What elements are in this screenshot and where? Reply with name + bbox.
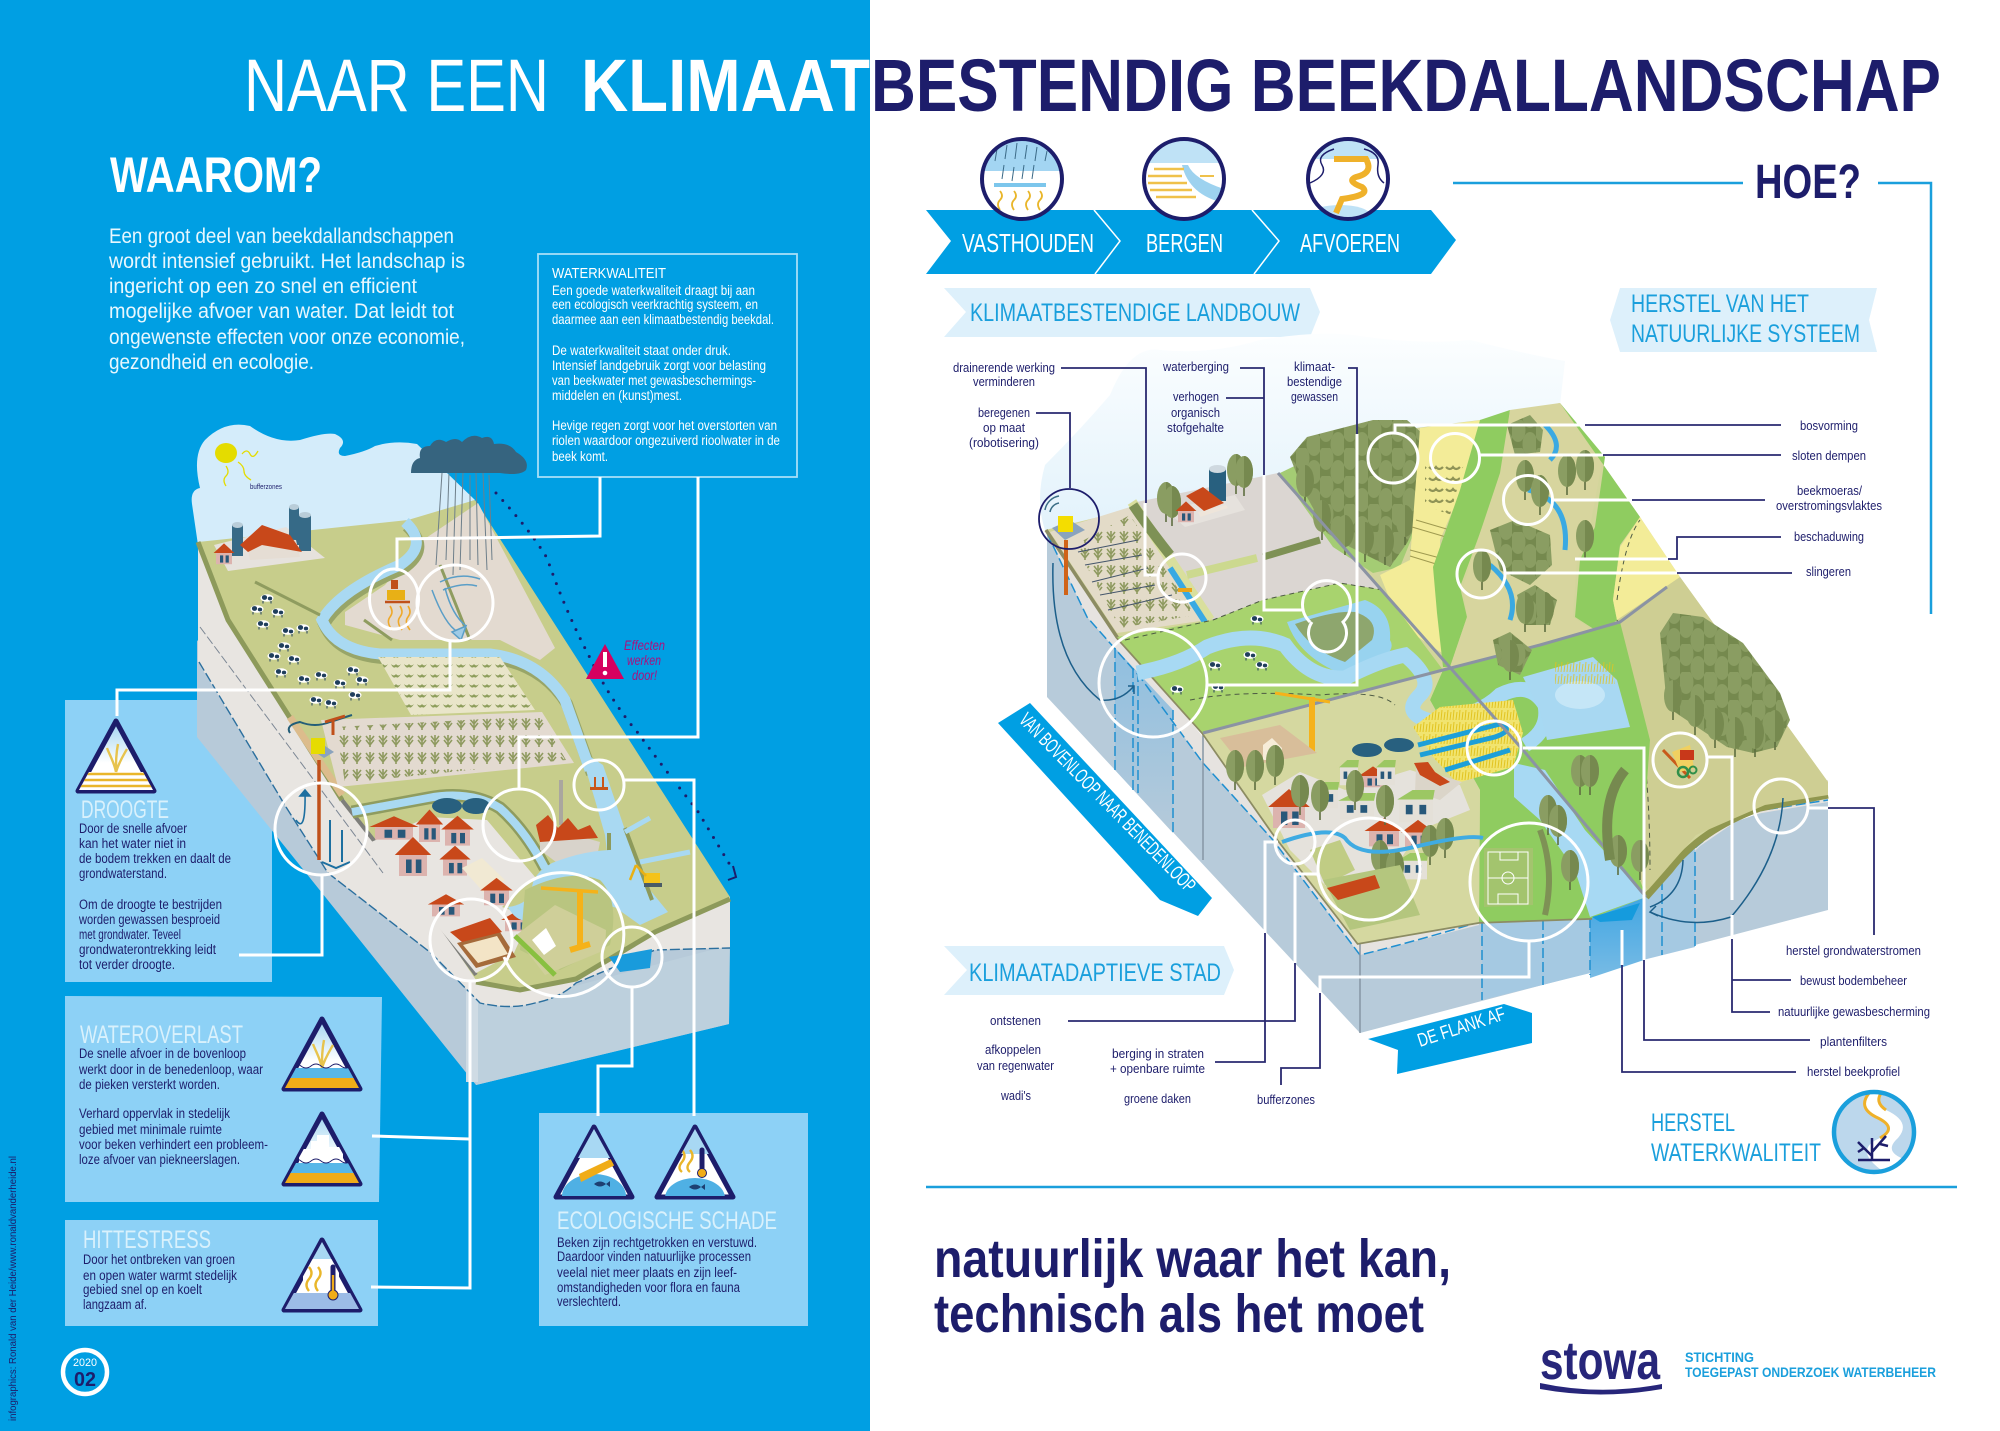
meadow — [1117, 583, 1443, 733]
cows — [250, 594, 368, 708]
panel: ecologische schade: Daardoor vinden natuurlijke processen — [557, 1249, 751, 1264]
labels: klimaatbestendige landbouw: (robotisering) — [969, 435, 1039, 450]
labels: klimaatbestendige landbouw: drainerende werking — [953, 360, 1055, 375]
panel: droogte: kan het water niet in — [79, 836, 186, 851]
beige field — [1132, 473, 1383, 620]
groundwater zones — [1115, 648, 1173, 833]
right: process ribbon: BERGEN — [1146, 228, 1223, 258]
labels: klimaatadaptieve stad: groene daken — [1124, 1091, 1191, 1106]
right: process ribbon — [926, 210, 1456, 274]
labels: herstel natuurlijk systeem: beekmoeras/ — [1797, 483, 1862, 498]
panel: hittestress: en open water warmt stedelijk — [83, 1268, 237, 1283]
panel: ecologische schade: ECOLOGISCHE SCHADE — [557, 1207, 777, 1235]
panel: waterkwaliteit: Hevige regen zorgt voor het overstorten van — [552, 418, 777, 433]
field surface — [198, 500, 730, 988]
panel: wateroverlast: Verhard oppervlak in stedelijk — [79, 1106, 230, 1121]
banner: van bovenloop naar benedenloop — [998, 703, 1212, 916]
logo: stowa: stowa — [1540, 1331, 1661, 1391]
right: process ribbon: AFVOEREN — [1300, 228, 1400, 258]
ribbon: klimaatbestendige landbouw: KLIMAATBESTENDIGE LANDBOUW — [970, 299, 1300, 327]
heading: herstel waterkwaliteit — [1651, 1109, 1821, 1167]
bright green bank — [1560, 403, 1640, 633]
panel: droogte: tot verder droogte. — [79, 957, 175, 972]
panel: wateroverlast: loze afvoer van piekneerslagen. — [79, 1152, 240, 1167]
heading: herstel waterkwaliteit: WATERKWALITEIT — [1651, 1139, 1821, 1167]
labels: bodem en water: bewust bodembeheer — [1800, 973, 1908, 988]
panel: droogte: de bodem trekken en daalt de — [79, 851, 231, 866]
reed field with helophytes — [1413, 700, 1523, 783]
label: bufferzones: bufferzones — [250, 482, 282, 491]
lower green — [1430, 622, 1650, 922]
block side — [1047, 530, 1828, 1033]
valley trees — [1473, 415, 1594, 680]
labels: klimaatbestendige landbouw — [953, 359, 1342, 450]
panel: hittestress: Door het ontbreken van groen — [83, 1252, 235, 1267]
icon: afvoeren — [1308, 139, 1388, 225]
panel: waterkwaliteit — [538, 254, 797, 477]
panel: droogte: worden gewassen besproeid — [78, 912, 220, 927]
labels: klimaatbestendige landbouw: beregenen — [978, 405, 1030, 420]
labels: klimaatadaptieve stad: bufferzones — [1257, 1092, 1315, 1107]
water treatment tanks — [432, 798, 490, 814]
labels: herstel natuurlijk systeem: overstromingsvlaktes — [1776, 498, 1882, 513]
warning: effecten werken door: door! — [632, 668, 657, 683]
labels: klimaatbestendige landbouw: organisch — [1171, 405, 1220, 420]
front pond — [609, 949, 652, 972]
dotted arrow: effects continue — [496, 493, 736, 880]
labels: klimaatbestendige landbouw: verminderen — [973, 374, 1035, 389]
intro text: gezondheid en ecologie. — [109, 351, 314, 374]
labels: bodem en water: herstel grondwaterstromen — [1786, 943, 1921, 958]
stowa tagline: STICHTING — [1685, 1349, 1754, 1365]
groundwater arrows — [296, 790, 350, 868]
surface — [1045, 403, 1828, 943]
groundwater flow arrows — [1053, 563, 1783, 922]
ribbon: herstel natuurlijke systeem — [1610, 288, 1877, 352]
heading: waarom: WAAROM? — [110, 147, 322, 203]
intro text: wordt intensief gebruikt. Het landschap is — [108, 250, 465, 273]
pale sky — [1040, 334, 1565, 530]
ribbon: klimaatadaptieve stad: KLIMAATADAPTIEVE STAD — [969, 959, 1221, 987]
stowa tagline: TOEGEPAST ONDERZOEK WATERBEHEER — [1685, 1364, 1936, 1380]
badge: 2020 02: 2020 — [73, 1357, 97, 1369]
farm — [214, 504, 325, 571]
panel: droogte: grondwaterontrekking leidt — [79, 942, 216, 957]
lower channel — [352, 796, 545, 868]
labels: klimaatbestendige landbouw: waterberging — [1162, 359, 1229, 374]
town houses — [369, 810, 535, 931]
olive field and forest — [1617, 577, 1828, 890]
factory — [536, 780, 600, 868]
icon: droogte triangle — [75, 721, 157, 792]
town — [369, 817, 535, 973]
slogan: natuurlijk waar het kan, — [934, 1229, 1451, 1289]
labels: bodem en water: plantenfilters — [1820, 1034, 1887, 1049]
town grey area — [1262, 770, 1470, 900]
panel: droogte: met grondwater. Teveel — [79, 927, 181, 942]
storm cloud — [411, 436, 527, 474]
heading: hoe: HOE? — [1755, 156, 1861, 209]
icon: warm water triangle — [654, 1124, 736, 1200]
labels: herstel natuurlijk systeem — [1776, 418, 1882, 579]
lagoon and construction — [508, 850, 636, 921]
icon: wateroverlast city triangle — [281, 1114, 363, 1184]
pump robot — [1045, 496, 1085, 595]
intro text: Een groot deel van beekdallandschappen — [109, 225, 454, 248]
title: KLIMAAT — [581, 44, 870, 127]
panel: hittestress: HITTESTRESS — [83, 1226, 211, 1254]
heading: hoe — [1453, 156, 1931, 614]
panel: ecologische schade: verslechterd. — [557, 1294, 621, 1309]
ribbon: herstel natuurlijke systeem: HERSTEL VAN HET — [1631, 290, 1809, 318]
labels: klimaatadaptieve stad: van regenwater — [977, 1058, 1055, 1073]
panel: wateroverlast: gebied met minimale ruimte — [79, 1122, 222, 1137]
labels: klimaatbestendige landbouw: klimaat- — [1294, 359, 1335, 374]
intro text — [108, 225, 465, 374]
town base — [1203, 670, 1480, 943]
panel: wateroverlast: voor beken verhindert een probleem- — [79, 1137, 268, 1152]
building plot — [1220, 725, 1317, 767]
ribbon: herstel natuurlijke systeem: NATUURLIJKE SYSTEEM — [1631, 320, 1860, 348]
warning: effecten werken door: Effecten — [624, 638, 665, 653]
stowa tagline — [1685, 1349, 1936, 1380]
panel: wateroverlast — [65, 996, 382, 1202]
intro text: ongewenste effecten voor onze economie, — [109, 326, 465, 349]
slogan — [934, 1229, 1451, 1344]
warning: effecten werken door — [586, 638, 665, 683]
ribbon: klimaatbestendige landbouw — [944, 288, 1320, 337]
labels: klimaatadaptieve stad: berging in straten — [1112, 1046, 1204, 1061]
banner: de flank af: DE FLANK AF — [1415, 1004, 1508, 1052]
icon: herstel waterkwaliteit — [1834, 1092, 1914, 1172]
soccer field — [1484, 830, 1549, 915]
farm — [1157, 454, 1253, 527]
left blue background — [0, 0, 870, 1431]
labels: bodem en water: herstel beekprofiel — [1807, 1064, 1900, 1079]
tractor over field — [385, 580, 410, 630]
labels: klimaatbestendige landbouw: stofgehalte — [1167, 420, 1224, 435]
labels: bodem en water — [1778, 943, 1930, 1079]
irrigated crops — [378, 657, 535, 715]
icon: stuw triangle — [554, 1124, 634, 1200]
panel: ecologische schade — [539, 1113, 808, 1326]
pump with well — [289, 715, 352, 860]
right field channels — [625, 818, 690, 862]
panel: wateroverlast: De snelle afvoer in de bovenloop — [79, 1046, 246, 1061]
rule — [926, 1186, 1957, 1188]
weir — [590, 777, 608, 790]
panel: wateroverlast: de pieken versterkt worden. — [79, 1077, 220, 1092]
panel: waterkwaliteit: Intensief landgebruik zorgt voor belasting — [552, 358, 766, 373]
panel: waterkwaliteit: De waterkwaliteit staat onder druk. — [552, 343, 731, 358]
warning: effecten werken door: werken — [627, 653, 661, 668]
river — [324, 526, 592, 774]
soil strip — [198, 542, 730, 1006]
lake — [1523, 657, 1630, 740]
panel: waterkwaliteit: een ecologisch veerkrachtig systeem, en — [552, 297, 758, 312]
town buildings — [1268, 760, 1435, 879]
yellow field — [1380, 420, 1482, 655]
ribbon: klimaatadaptieve stad — [944, 946, 1234, 995]
panel: ecologische schade: veelal niet meer plaats en zijn leef- — [557, 1265, 737, 1280]
bank trees — [1539, 755, 1649, 890]
panel: wateroverlast: WATEROVERLAST — [80, 1021, 243, 1049]
drain swale — [1170, 568, 1205, 622]
soil strip — [1047, 533, 1479, 955]
banner: de flank af — [1368, 1004, 1532, 1074]
panel: waterkwaliteit: van beekwater met gewasbeschermings- — [552, 373, 756, 388]
lower river — [1514, 763, 1646, 917]
intro text: mogelijke afvoer van water. Dat leidt tot — [109, 300, 454, 323]
panel: hittestress: gebied snel op en koelt — [83, 1282, 202, 1297]
panel: droogte — [65, 700, 272, 982]
panel: waterkwaliteit: WATERKWALITEIT — [552, 265, 666, 282]
valley stream — [1490, 425, 1566, 620]
panel: droogte: DROOGTE — [81, 796, 169, 824]
corn field with drains — [1050, 507, 1207, 633]
labels: herstel natuurlijk systeem: bosvorming — [1800, 418, 1858, 433]
labels: herstel natuurlijk systeem: beschaduwing — [1794, 529, 1864, 544]
cows meadow — [1170, 615, 1268, 694]
run-off arrow — [432, 576, 480, 640]
icon: sun — [215, 443, 258, 486]
block side — [197, 640, 730, 1085]
slogan: technisch als het moet — [934, 1284, 1424, 1344]
labels: klimaatadaptieve stad: ontstenen — [990, 1013, 1041, 1028]
rain — [436, 473, 492, 575]
icon: wateroverlast land triangle — [281, 1019, 363, 1089]
crane — [1275, 693, 1330, 753]
title — [244, 44, 1941, 127]
labels: klimaatadaptieve stad: afkoppelen — [985, 1042, 1041, 1057]
glasshouse farm — [450, 918, 516, 968]
marsh pond — [1287, 600, 1392, 677]
panel: waterkwaliteit: daarmee aan een klimaatbestendig beekdal. — [552, 312, 774, 327]
valley — [1450, 403, 1603, 667]
title: NAAR EEN — [244, 44, 549, 127]
labels: klimaatbestendige landbouw: bestendige — [1287, 374, 1342, 389]
crane — [541, 888, 598, 950]
road — [1203, 473, 1667, 897]
right connector lines and circles — [1036, 368, 1874, 1085]
labels: herstel natuurlijk systeem: sloten dempen — [1792, 448, 1866, 463]
labels: klimaatadaptieve stad: + openbare ruimte — [1110, 1061, 1205, 1076]
lower river — [580, 750, 668, 925]
panel: waterkwaliteit: beek komt. — [552, 449, 608, 464]
panel: ecologische schade: Beken zijn rechtgetrokken en verstuwd. — [557, 1235, 757, 1250]
forest base — [1280, 428, 1430, 573]
tractor — [1663, 745, 1696, 778]
sky behind farm — [192, 425, 475, 560]
labels: klimaatbestendige landbouw: gewassen — [1291, 389, 1338, 404]
panel: hittestress — [65, 1220, 378, 1326]
panel: droogte: Om de droogte te bestrijden — [79, 897, 222, 912]
labels: klimaatbestendige landbouw: verhogen — [1173, 389, 1219, 404]
intro text: ingericht op een zo snel en efficient — [109, 275, 417, 298]
labels: klimaatbestendige landbouw: op maat — [983, 420, 1025, 435]
panel: waterkwaliteit: Een goede waterkwaliteit draagt bij aan — [552, 283, 755, 298]
badge: 2020 02: 02 — [74, 1369, 96, 1391]
panel: ecologische schade: omstandigheden voor flora en fauna — [557, 1280, 740, 1295]
right landscape block — [1040, 334, 1828, 1033]
labels: herstel natuurlijk systeem: slingeren — [1806, 564, 1851, 579]
icon: vasthouden — [982, 139, 1062, 219]
banner: van bovenloop naar benedenloop: VAN BOVENLOOP NAAR BENEDENLOOP — [1014, 709, 1200, 897]
credit line: infographics: Ronald van der Heide/www.ronaldvanderheide.nl — [7, 1156, 19, 1421]
panel: droogte: Door de snelle afvoer — [79, 821, 187, 836]
green strip — [1433, 410, 1510, 667]
river — [1137, 638, 1546, 745]
heading: herstel waterkwaliteit: HERSTEL — [1651, 1109, 1735, 1137]
icon: hitte triangle — [281, 1237, 363, 1310]
panel: wateroverlast: werkt door in de benedenloop, waar — [78, 1062, 263, 1077]
labels: klimaatadaptieve stad: wadi's — [1000, 1088, 1031, 1103]
panel: droogte: grondwaterstand. — [79, 866, 167, 881]
top beige field — [345, 503, 555, 660]
panel: hittestress: langzaam af. — [83, 1297, 147, 1312]
yellow wedge — [1613, 517, 1680, 620]
labels: klimaatadaptieve stad — [977, 1013, 1315, 1107]
icon: bergen — [1144, 139, 1224, 219]
right: process ribbon: VASTHOUDEN — [962, 228, 1094, 258]
forest — [1290, 420, 1430, 567]
left connector lines and circles — [117, 477, 698, 1288]
panel: waterkwaliteit: riolen waardoor ongezuiverd rioolwater in de — [552, 433, 780, 448]
corn field — [321, 712, 574, 787]
labels: bodem en water: natuurlijke gewasbescherming — [1778, 1004, 1930, 1019]
panel: waterkwaliteit: middelen en (kunst)mest. — [552, 388, 682, 403]
badge: 2020 02 — [63, 1350, 107, 1394]
ditches — [255, 565, 470, 640]
excavator — [630, 865, 662, 887]
left landscape block — [192, 425, 730, 1085]
